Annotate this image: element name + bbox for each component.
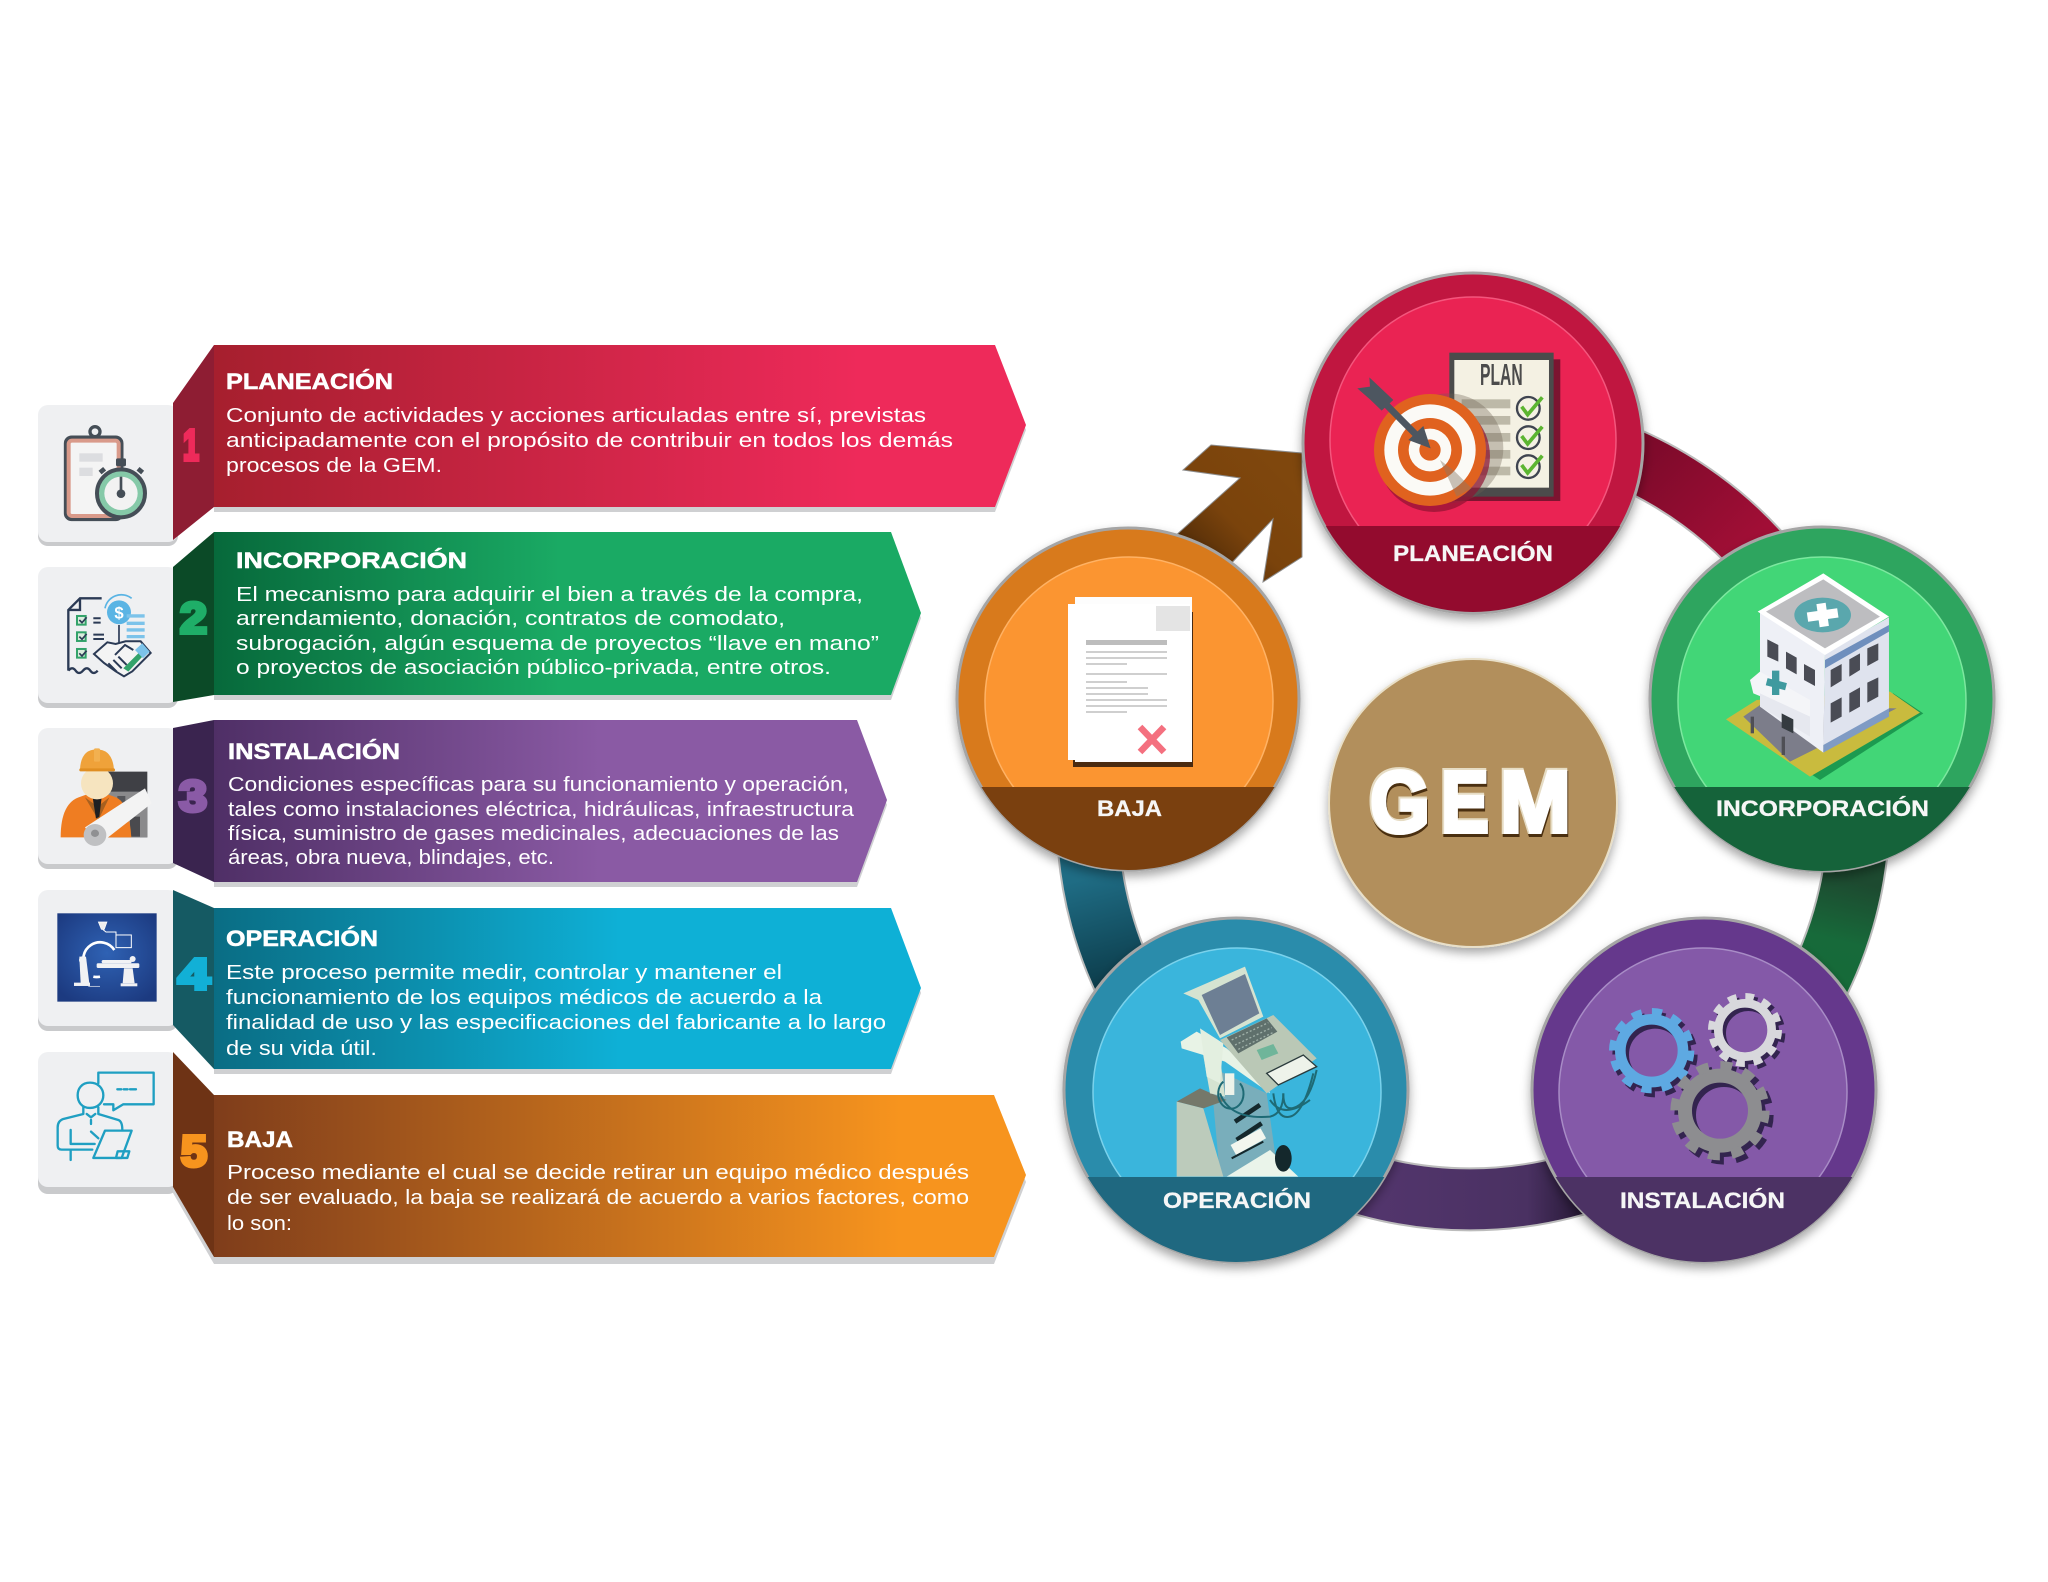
icon: person with laptop and speech bubble <box>58 1073 154 1160</box>
GEM wordmark: G <box>1370 754 1430 851</box>
label band: planeación <box>1326 526 1620 612</box>
banner 4 <box>214 908 921 1074</box>
body 3: áreas, obra nueva, blindajes, etc. <box>228 846 554 869</box>
arrow: baja to planeación <box>1165 445 1302 600</box>
connector arc: planeación to incorporación <box>1474 426 1840 693</box>
connector arc: instalación to operación <box>1221 1108 1719 1199</box>
body 3 <box>228 773 855 869</box>
GEM wordmark: G <box>1370 756 1430 853</box>
body 4: de su vida útil. <box>226 1037 377 1060</box>
body 5: Proceso mediante el cual se decide retirar un equipo médico después <box>227 1161 969 1184</box>
label: incorporación: INCORPORACIÓN <box>1716 796 1929 821</box>
icon card 1 <box>38 405 178 546</box>
body 4 <box>226 961 886 1060</box>
label band: operación <box>1088 1177 1384 1262</box>
number 4: 4 <box>178 950 211 999</box>
icon card 2 <box>38 567 178 708</box>
banner 1 flap <box>173 345 214 540</box>
icon: target and plan checklist: PLAN <box>1480 358 1523 392</box>
panel: step 4 operación <box>38 890 921 1074</box>
label: baja: BAJA <box>1097 796 1162 821</box>
body 1: Conjunto de actividades y acciones articuladas entre sí, previstas <box>226 404 926 427</box>
GEM wordmark: M <box>1500 754 1571 851</box>
icon card 3 <box>38 728 178 869</box>
blue gear <box>1613 1012 1693 1093</box>
banner 1 <box>214 345 1026 512</box>
panel: step 1 planeación <box>38 345 1026 546</box>
body 2 <box>236 583 879 679</box>
light gear <box>1712 997 1782 1067</box>
body 3: Condiciones específicas para su funcionamiento y operación, <box>228 773 849 796</box>
body 4: funcionamiento de los equipos médicos de acuerdo a la <box>226 986 823 1009</box>
banner 2 flap <box>173 532 214 702</box>
banner 5 flap <box>173 1052 214 1257</box>
body 4: Este proceso permite medir, controlar y mantener el <box>226 961 782 984</box>
panel: step 5 baja <box>38 1052 1026 1264</box>
heading 4: OPERACIÓN <box>226 926 378 951</box>
circle: instalación <box>1520 918 1890 1267</box>
label band: baja <box>982 787 1274 870</box>
GEM wordmark: E <box>1440 753 1488 850</box>
heading 1: PLANEACIÓN <box>226 369 393 394</box>
icon: checklist, coin and handshake <box>68 595 151 676</box>
number 5: 5 <box>181 1127 207 1176</box>
icon: medical imaging room <box>57 913 157 1002</box>
body 5 <box>227 1161 969 1235</box>
number 3: 3 <box>179 772 207 821</box>
circle: incorporación <box>1640 527 2010 877</box>
body 3: tales como instalaciones eléctrica, hidráulicas, infraestructura <box>228 798 855 821</box>
GEM wordmark <box>1369 753 1571 853</box>
label band: instalación <box>1556 1177 1852 1262</box>
circle: baja <box>950 528 1310 877</box>
banner 5 <box>173 1095 1026 1264</box>
body 2: subrogación, algún esquema de proyectos “llave en mano” <box>236 632 879 655</box>
body 1: anticipadamente con el propósito de contribuir en todos los demás <box>226 429 953 452</box>
icon: medical monitor cart <box>1177 967 1317 1177</box>
GEM wordmark: M <box>1500 756 1571 853</box>
icon: discarded document <box>1068 597 1193 767</box>
body 2: El mecanismo para adquirir el bien a través de la compra, <box>236 583 863 606</box>
banner 2 <box>214 532 921 700</box>
icon card 5 <box>38 1052 178 1194</box>
GEM wordmark: E <box>1441 754 1489 851</box>
icon: three gears <box>1613 997 1782 1160</box>
number 1: 1 <box>183 421 199 470</box>
icon: checklist, coin and handshake: $ <box>114 603 124 622</box>
panel: step 2 incorporación <box>38 532 921 708</box>
body 3: física, suministro de gases medicinales, adecuaciones de las <box>228 822 839 845</box>
heading 5: BAJA <box>227 1127 293 1152</box>
connector arc: incorporación to instalación <box>1719 693 1859 1108</box>
body 5: lo son: <box>227 1212 292 1235</box>
icon: engineer with plans <box>61 748 152 846</box>
icon: clipboard and stopwatch <box>66 427 145 519</box>
icon card 4 <box>38 890 178 1031</box>
center circle: GEM <box>1329 659 1617 947</box>
icon: hospital building <box>1726 573 1923 780</box>
GEM wordmark: G <box>1369 753 1429 850</box>
banner 3 flap <box>173 720 214 882</box>
circle: operación <box>1050 918 1420 1267</box>
panel: step 3 instalación <box>38 720 887 887</box>
circle: planeación <box>1300 273 1650 616</box>
GEM wordmark: M <box>1499 753 1570 850</box>
body 2: o proyectos de asociación público-privada, entre otros. <box>236 656 831 679</box>
icon: target and plan checklist <box>1357 353 1560 512</box>
label: instalación: INSTALACIÓN <box>1620 1188 1785 1213</box>
banner 3 <box>214 720 887 887</box>
label: operación: OPERACIÓN <box>1163 1188 1311 1213</box>
body 1 <box>226 404 953 477</box>
panel: GEM cycle diagram <box>950 273 2010 1267</box>
GEM wordmark: E <box>1441 756 1489 853</box>
number 2: 2 <box>180 594 207 643</box>
grey gear <box>1675 1066 1769 1160</box>
heading 3: INSTALACIÓN <box>228 739 400 764</box>
label band: incorporación <box>1674 787 1970 871</box>
connector arc: operación to baja <box>1088 693 1221 1108</box>
body 5: de ser evaluado, la baja se realizará de acuerdo a varios factores, como <box>227 1186 969 1209</box>
body 4: finalidad de uso y las especificaciones del fabricante a lo largo <box>226 1011 886 1034</box>
label: planeación: PLANEACIÓN <box>1393 541 1553 566</box>
banner 4 flap <box>173 890 214 1069</box>
body 1: procesos de la GEM. <box>226 454 442 477</box>
heading 2: INCORPORACIÓN <box>236 548 467 573</box>
body 2: arrendamiento, donación, contratos de comodato, <box>236 607 785 630</box>
